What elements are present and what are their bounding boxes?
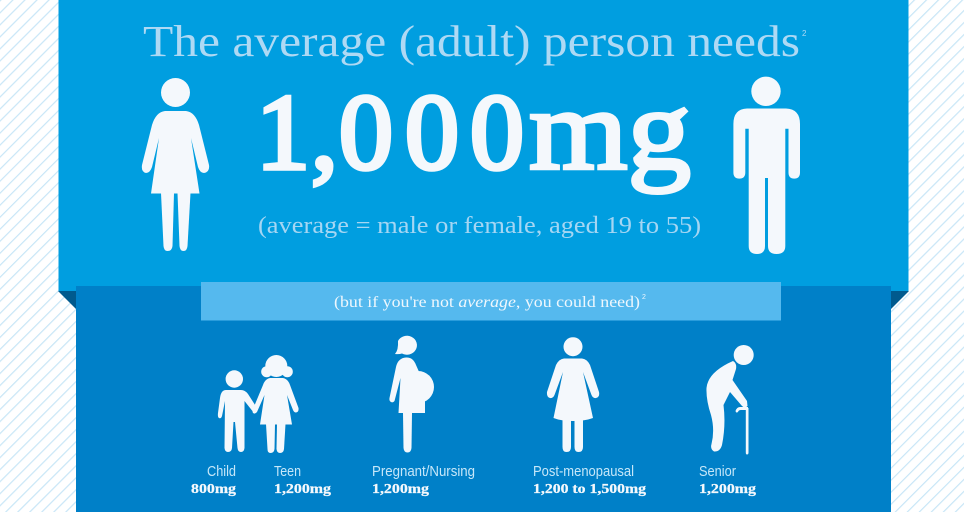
big number [256,66,691,194]
icon: child [218,370,257,452]
label: Teen [274,463,301,480]
value: 1,200mg [699,481,756,496]
footnote marker: 2 [642,294,646,301]
label: Post-menopausal [533,463,634,480]
icon: woman [142,78,209,251]
band: not average [201,282,781,320]
icon: older woman [547,337,599,452]
label: Senior [699,463,736,480]
icon: teen [252,355,299,453]
heading: The average (adult) person needs [143,17,800,66]
fold: left [58,291,76,309]
subtitle: (average = male or female, aged 19 to 55) [258,212,701,239]
big number: 1,000 [256,73,524,192]
icon: senior with cane [706,345,754,454]
icon: pregnant woman [389,336,434,452]
value: 1,200mg [372,481,429,496]
fold: right [891,291,909,309]
band text: (but if you're not average , you could need) [334,294,640,311]
group: pregnant [372,336,475,496]
value: 1,200 to 1,500mg [533,481,646,496]
panel: lower panel [76,286,891,512]
big number: mg [529,66,691,194]
group: child [191,370,257,496]
value: 1,200mg [274,481,331,496]
label: Pregnant/Nursing [372,463,475,480]
icon: man [733,77,800,254]
label: Child [207,463,236,480]
group: senior [699,345,756,496]
panel: average adult [58,0,908,291]
value: 800mg [191,481,236,496]
group: teen [252,355,331,496]
footnote marker: 2 [802,29,807,38]
group: post-menopausal [533,337,646,496]
